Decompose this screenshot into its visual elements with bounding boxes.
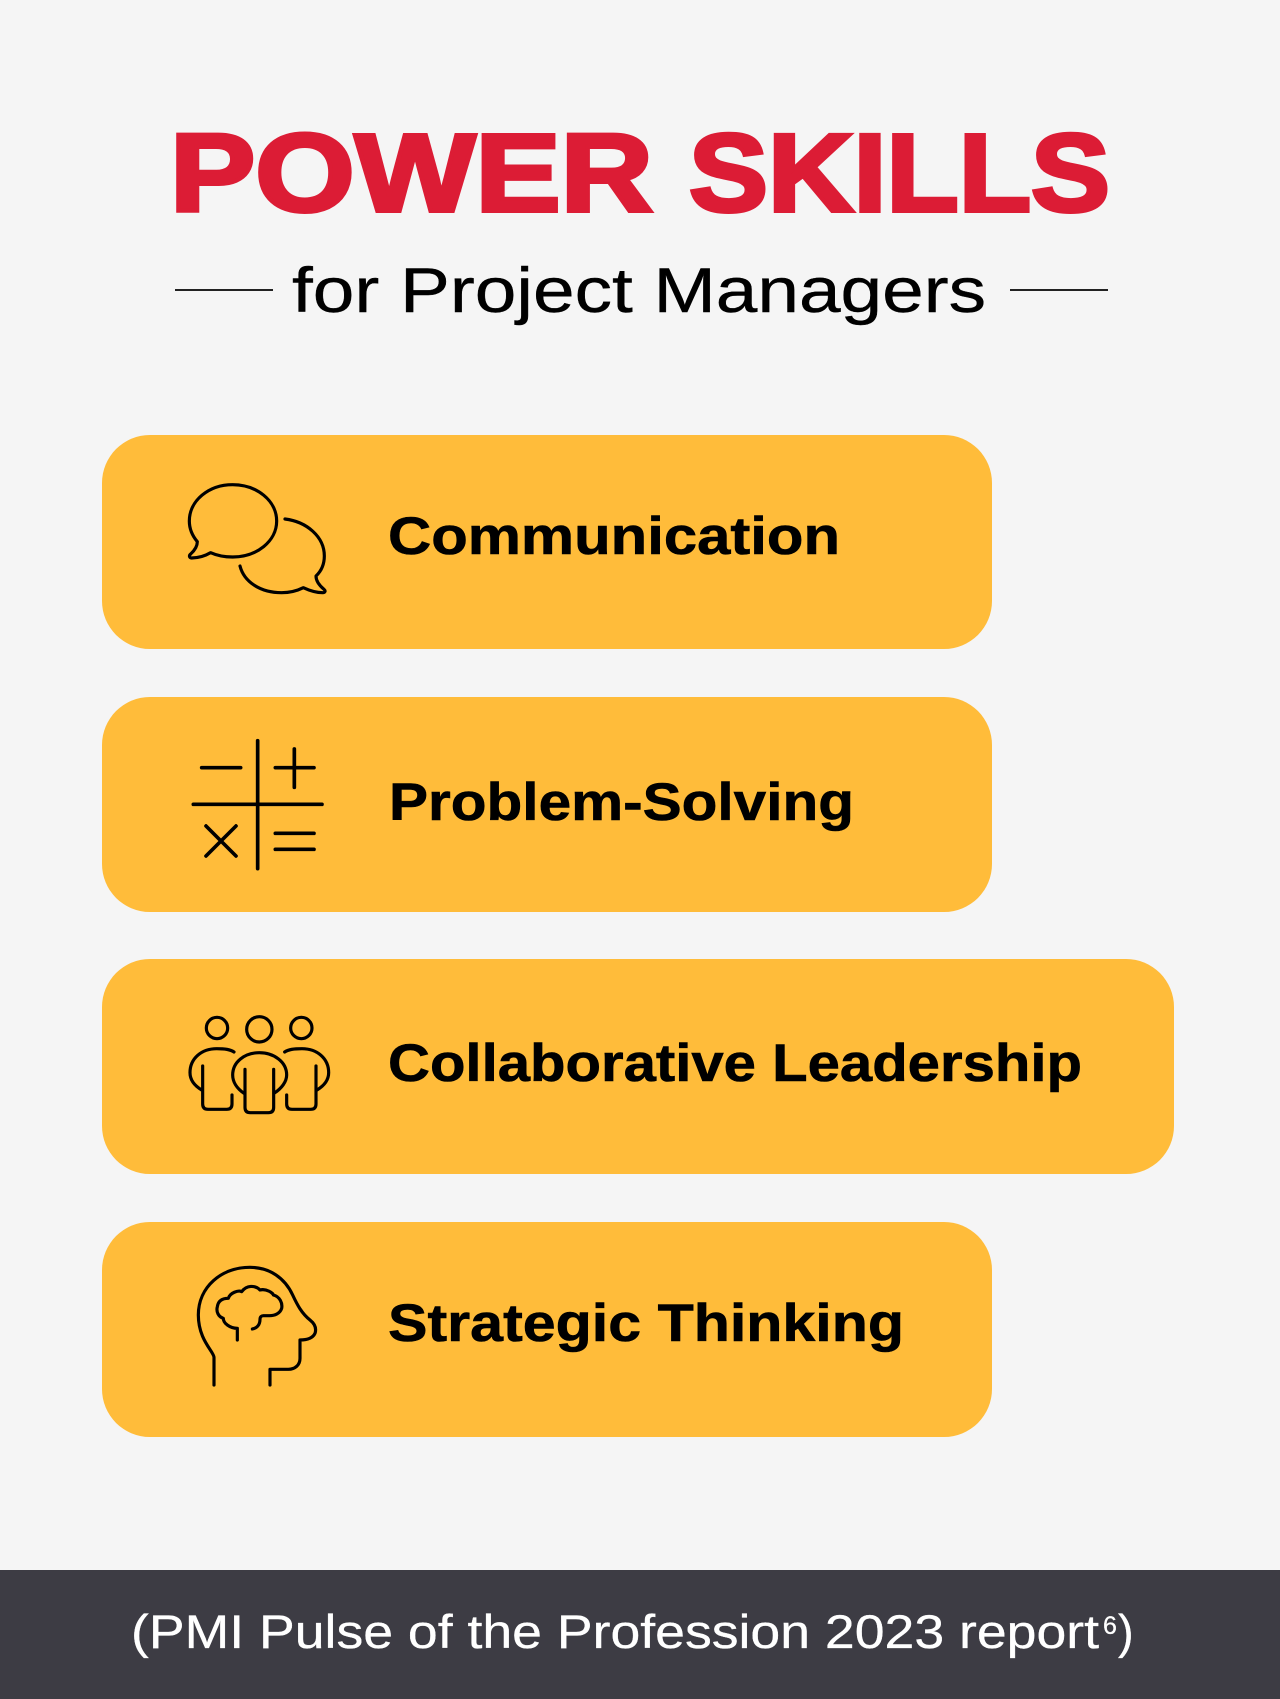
footer bar <box>0 1570 1280 1699</box>
icon: head with brain <box>198 1267 316 1385</box>
icon: math symbols <box>193 741 322 869</box>
icon: speech bubbles <box>189 485 325 593</box>
label: strategic thinking: Strategic Thinking <box>388 1294 904 1353</box>
title: SKILLS <box>689 112 1110 235</box>
label: problem-solving: Problem-Solving <box>389 773 854 832</box>
source citation: 6 <box>1103 1612 1117 1640</box>
label: communication: Communication <box>388 507 840 566</box>
title: POWER <box>170 112 653 235</box>
subtitle text: for Project Managers <box>292 256 986 326</box>
label: collaborative leadership: Collaborative Leadership <box>388 1034 1082 1093</box>
source citation: (PMI Pulse of the Profession 2023 report <box>131 1605 1099 1658</box>
icon: three people <box>190 1017 329 1113</box>
panel: strategic thinking <box>102 1222 992 1437</box>
panel: problem-solving <box>102 697 992 912</box>
panel: communication <box>102 435 992 649</box>
source citation: ) <box>1118 1605 1134 1658</box>
panel: collaborative leadership <box>102 959 1174 1174</box>
